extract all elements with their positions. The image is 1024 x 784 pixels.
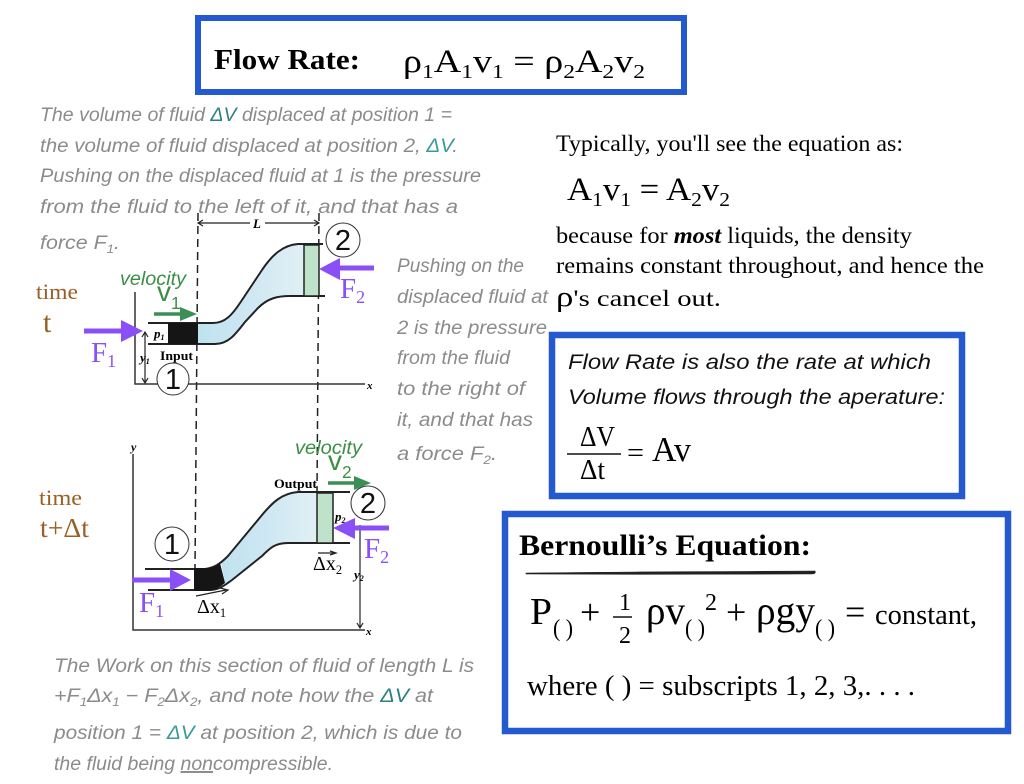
equation: Bernoulli: ρv <box>646 588 685 633</box>
position marker 2 at time t plus delta t: 2 <box>360 488 376 520</box>
equation: flow rate: 2 <box>633 61 645 83</box>
diagram: pipe at time t <box>135 216 373 392</box>
equation: simplified flow rate: v <box>702 172 720 208</box>
equation: Bernoulli: ( ) <box>553 616 573 642</box>
output fluid segment <box>317 493 333 543</box>
displacement and axis labels: x <box>365 626 372 638</box>
label: time t: time <box>36 279 78 304</box>
equation: simplified flow rate: 2 <box>719 189 730 211</box>
position marker 1 at time t <box>157 363 189 396</box>
text block: pressure and force F2: displaced fluid at <box>397 286 550 308</box>
input fluid plug <box>168 323 198 344</box>
equation: flow rate: v <box>614 44 634 80</box>
explanation paragraph <box>556 223 984 313</box>
equation: delta V over delta t equals Av: Δt <box>580 454 605 486</box>
text block: work on the fluid section: 1 <box>80 695 87 709</box>
text block: volume displaced and force F1: Pushing on the displaced fluid at 1 is the pressure <box>40 165 481 187</box>
text block: volume displaced and force F1: The volume of fluid ΔV displaced at position 1 = <box>40 104 452 126</box>
panel: flow rate heading box <box>198 18 684 92</box>
text block: pressure and force F2: it, and that has <box>397 409 533 431</box>
arrow: force F2 at time t plus delta t: F <box>364 533 380 565</box>
label: velocity v1 with arrow: 1 <box>171 293 181 313</box>
text block: pressure and force F2: from the fluid <box>397 347 511 369</box>
text block: work on the fluid section: position 1 = ΔV at position 2, which is due to <box>53 722 462 744</box>
text block: typical equation explanation: Typically, you'll see the equation as: <box>556 131 903 156</box>
dimension L: L <box>252 216 261 231</box>
equation: delta V over delta t equals Av: Av <box>652 430 691 469</box>
text block: work on the fluid section: Δx <box>86 685 114 707</box>
fluid fill <box>198 244 304 344</box>
text block: pressure and force F2: a force F <box>397 443 474 465</box>
explanation paragraph: remains constant throughout, and hence the <box>556 253 984 278</box>
explanation paragraph: ρ's cancel out. <box>556 282 721 313</box>
equation: flow rate: 1 <box>422 61 434 83</box>
displacement and axis labels: y <box>129 440 137 454</box>
heading: Flow Rate: Flow Rate: <box>214 44 360 76</box>
position marker 1 at time t: 1 <box>165 364 181 396</box>
equation: delta V over delta t equals Av <box>567 421 691 486</box>
dimension L <box>198 216 319 231</box>
displacement and axis labels <box>129 440 372 638</box>
handwritten note <box>568 351 945 409</box>
label: time t plus delta t: time <box>39 485 82 510</box>
heading: Bernoulli's Equation: Bernoulli’s Equation: <box>519 529 811 562</box>
pressure p1 and height y1 labels: 1 <box>146 357 150 366</box>
text block: pressure and force F2: 2 is the pressure <box>396 317 547 339</box>
equation: Bernoulli <box>530 588 977 649</box>
panel: Bernoulli's equation <box>505 514 1008 731</box>
equation: Bernoulli: 1 <box>619 590 631 616</box>
arrow: force F1 at time t plus delta t: 1 <box>155 601 164 621</box>
axes <box>133 454 365 630</box>
equation: Bernoulli: = <box>845 592 865 632</box>
pressure p1 and height y1 labels: Input <box>160 349 194 363</box>
equation: flow rate: A <box>575 44 603 80</box>
label: velocity v2 with arrow <box>295 437 371 490</box>
input fluid plug <box>194 563 225 591</box>
equation: simplified flow rate: 1 <box>620 189 631 211</box>
equation: delta V over delta t equals Av: = <box>627 437 644 469</box>
displacement and axis labels: 2 <box>336 563 342 577</box>
equation: flow rate: 2 <box>563 61 575 83</box>
position marker 2 at time t plus delta t <box>351 486 385 520</box>
text block: work on the fluid section: +F <box>54 685 77 707</box>
equation: flow rate: 2 <box>602 61 614 83</box>
handwritten note: Flow Rate is also the rate at which <box>568 351 931 374</box>
text block: pressure and force F2: . <box>491 443 497 465</box>
equation: Bernoulli: constant, <box>875 600 977 631</box>
equation: simplified flow rate: = A <box>631 172 691 208</box>
arrow: force F2 at time t: F <box>340 273 356 305</box>
label: time t: t <box>43 306 52 339</box>
arrow: force F1 at time t: 1 <box>107 351 116 371</box>
equation: Bernoulli: ( ) <box>815 616 835 642</box>
equation: Bernoulli: ( ) <box>685 616 705 642</box>
label: velocity v2 with arrow: velocity <box>295 437 363 459</box>
text block: pressure and force F2: 2 <box>482 453 491 467</box>
text block: pressure and force F2 <box>396 255 550 467</box>
text block: work on the fluid section: , and note how the <box>197 685 380 707</box>
text block: work on the fluid section: Δx <box>164 685 191 707</box>
displacement and axis labels: 1 <box>220 606 226 620</box>
equation: simplified flow rate: A <box>567 172 591 208</box>
label: velocity v2 with arrow: 2 <box>342 462 352 482</box>
equation: flow rate: 1 <box>492 61 504 83</box>
equation: flow rate: ρ <box>403 44 419 80</box>
text block: volume displaced and force F1: the volume of fluid displaced at position 2, ΔV. <box>40 135 458 157</box>
equation: flow rate: = ρ <box>504 44 563 80</box>
equation: Bernoulli: + <box>726 592 746 632</box>
arrow: force F2 at time t plus delta t <box>333 518 389 567</box>
equation: flow rate: A <box>434 44 461 80</box>
text block: work on the fluid section <box>53 655 474 775</box>
pressure p1 and height y1 labels: x <box>366 380 373 392</box>
equation: Bernoulli: 2 <box>619 623 631 649</box>
text block: work on the fluid section: 2 <box>189 695 198 709</box>
arrow: force F2 at time t <box>319 258 374 307</box>
position marker 2 at time t: 2 <box>335 225 351 257</box>
equation: simplified flow rate: 1 <box>592 189 603 211</box>
text block: pressure and force F2: Pushing on the <box>397 255 524 277</box>
equation: Bernoulli: P <box>530 591 552 633</box>
text block: work on the fluid section: − F <box>120 685 159 707</box>
pressure p1 and height y1 labels <box>138 326 373 392</box>
text block: volume displaced and force F1: force F <box>40 232 101 254</box>
equation: Bernoulli: 2 <box>705 590 717 616</box>
text block: volume displaced and force F1: . <box>114 232 120 254</box>
position marker 2 at time t <box>326 223 360 257</box>
text block: typical equation explanation <box>556 131 984 313</box>
displacement and axis labels: Output <box>274 476 318 491</box>
text block: volume displaced and force F1 <box>40 104 481 256</box>
displacement and axis labels: y <box>354 567 360 582</box>
note: subscripts: where ( ) = subscripts 1, 2, 3,. . . . <box>527 671 915 702</box>
displacement and axis labels: p <box>335 509 342 524</box>
text block: pressure and force F2: to the right of <box>397 378 528 400</box>
label: velocity v1 with arrow <box>120 268 197 321</box>
displacement and axis labels: Δx <box>313 553 336 575</box>
text block: work on the fluid section: 1 <box>112 695 120 709</box>
arrow: force F1 at time t <box>84 320 143 371</box>
pressure p1 and height y1 labels: 1 <box>160 333 165 342</box>
text block: work on the fluid section: the fluid being noncompressible. <box>54 753 333 775</box>
equation: Bernoulli: + <box>580 592 600 632</box>
arrow: force F1 at time t: F <box>91 337 107 369</box>
label: velocity v1 with arrow: v <box>157 276 171 307</box>
panel: volume flow rate <box>552 335 962 496</box>
diagram: pipe at time t plus delta t <box>129 440 372 638</box>
pipe walls <box>145 492 350 590</box>
pressure p1 and height y1 labels: y <box>140 350 146 365</box>
equation: flow rate: 1 <box>461 61 473 83</box>
equation: flow rate: v <box>473 44 493 80</box>
arrow: force F2 at time t plus delta t: 2 <box>380 547 389 567</box>
equation: simplified flow rate: 2 <box>691 189 702 211</box>
position marker 1 at time t plus delta t: 1 <box>164 529 180 561</box>
handwritten note: Volume flows through the aperature: <box>568 386 945 409</box>
label: time t <box>36 279 78 339</box>
fluid fill <box>221 492 317 584</box>
position marker 1 at time t plus delta t <box>155 527 189 561</box>
displacement and axis labels: Δx <box>197 596 220 618</box>
hand-drawn underline <box>526 571 815 574</box>
equation: simplified flow rate: v <box>603 172 621 208</box>
arrow: force F1 at time t plus delta t: F <box>139 587 155 619</box>
text block: work on the fluid section: 2 <box>156 695 165 709</box>
equation: Bernoulli: ρgy <box>756 588 815 633</box>
output fluid segment <box>304 245 319 296</box>
text block: volume displaced and force F1: 1 <box>107 242 114 256</box>
arrow: force F1 at time t plus delta t <box>132 569 191 621</box>
explanation paragraph: because for most liquids, the density <box>556 223 913 248</box>
displacement and axis labels: 2 <box>359 574 364 583</box>
label: time t plus delta t <box>39 485 90 543</box>
label: velocity v2 with arrow: v <box>328 445 342 476</box>
displacement and axis labels: 2 <box>340 516 346 525</box>
equation: delta V over delta t equals Av: ΔV <box>580 421 615 453</box>
pipe walls <box>148 244 325 344</box>
text block: work on the fluid section: The Work on this section of fluid of length L is <box>54 655 474 677</box>
text block: work on the fluid section: ΔV at <box>380 685 431 707</box>
label: velocity v1 with arrow: velocity <box>120 268 187 290</box>
text block: volume displaced and force F1: from the fluid to the left of it, and that has a <box>40 196 458 218</box>
axes <box>135 292 365 384</box>
dashed guide lines <box>195 213 319 568</box>
arrow: force F2 at time t: 2 <box>356 287 365 307</box>
pressure p1 and height y1 labels: p <box>154 326 160 341</box>
label: time t plus delta t: t+Δt <box>40 513 90 543</box>
